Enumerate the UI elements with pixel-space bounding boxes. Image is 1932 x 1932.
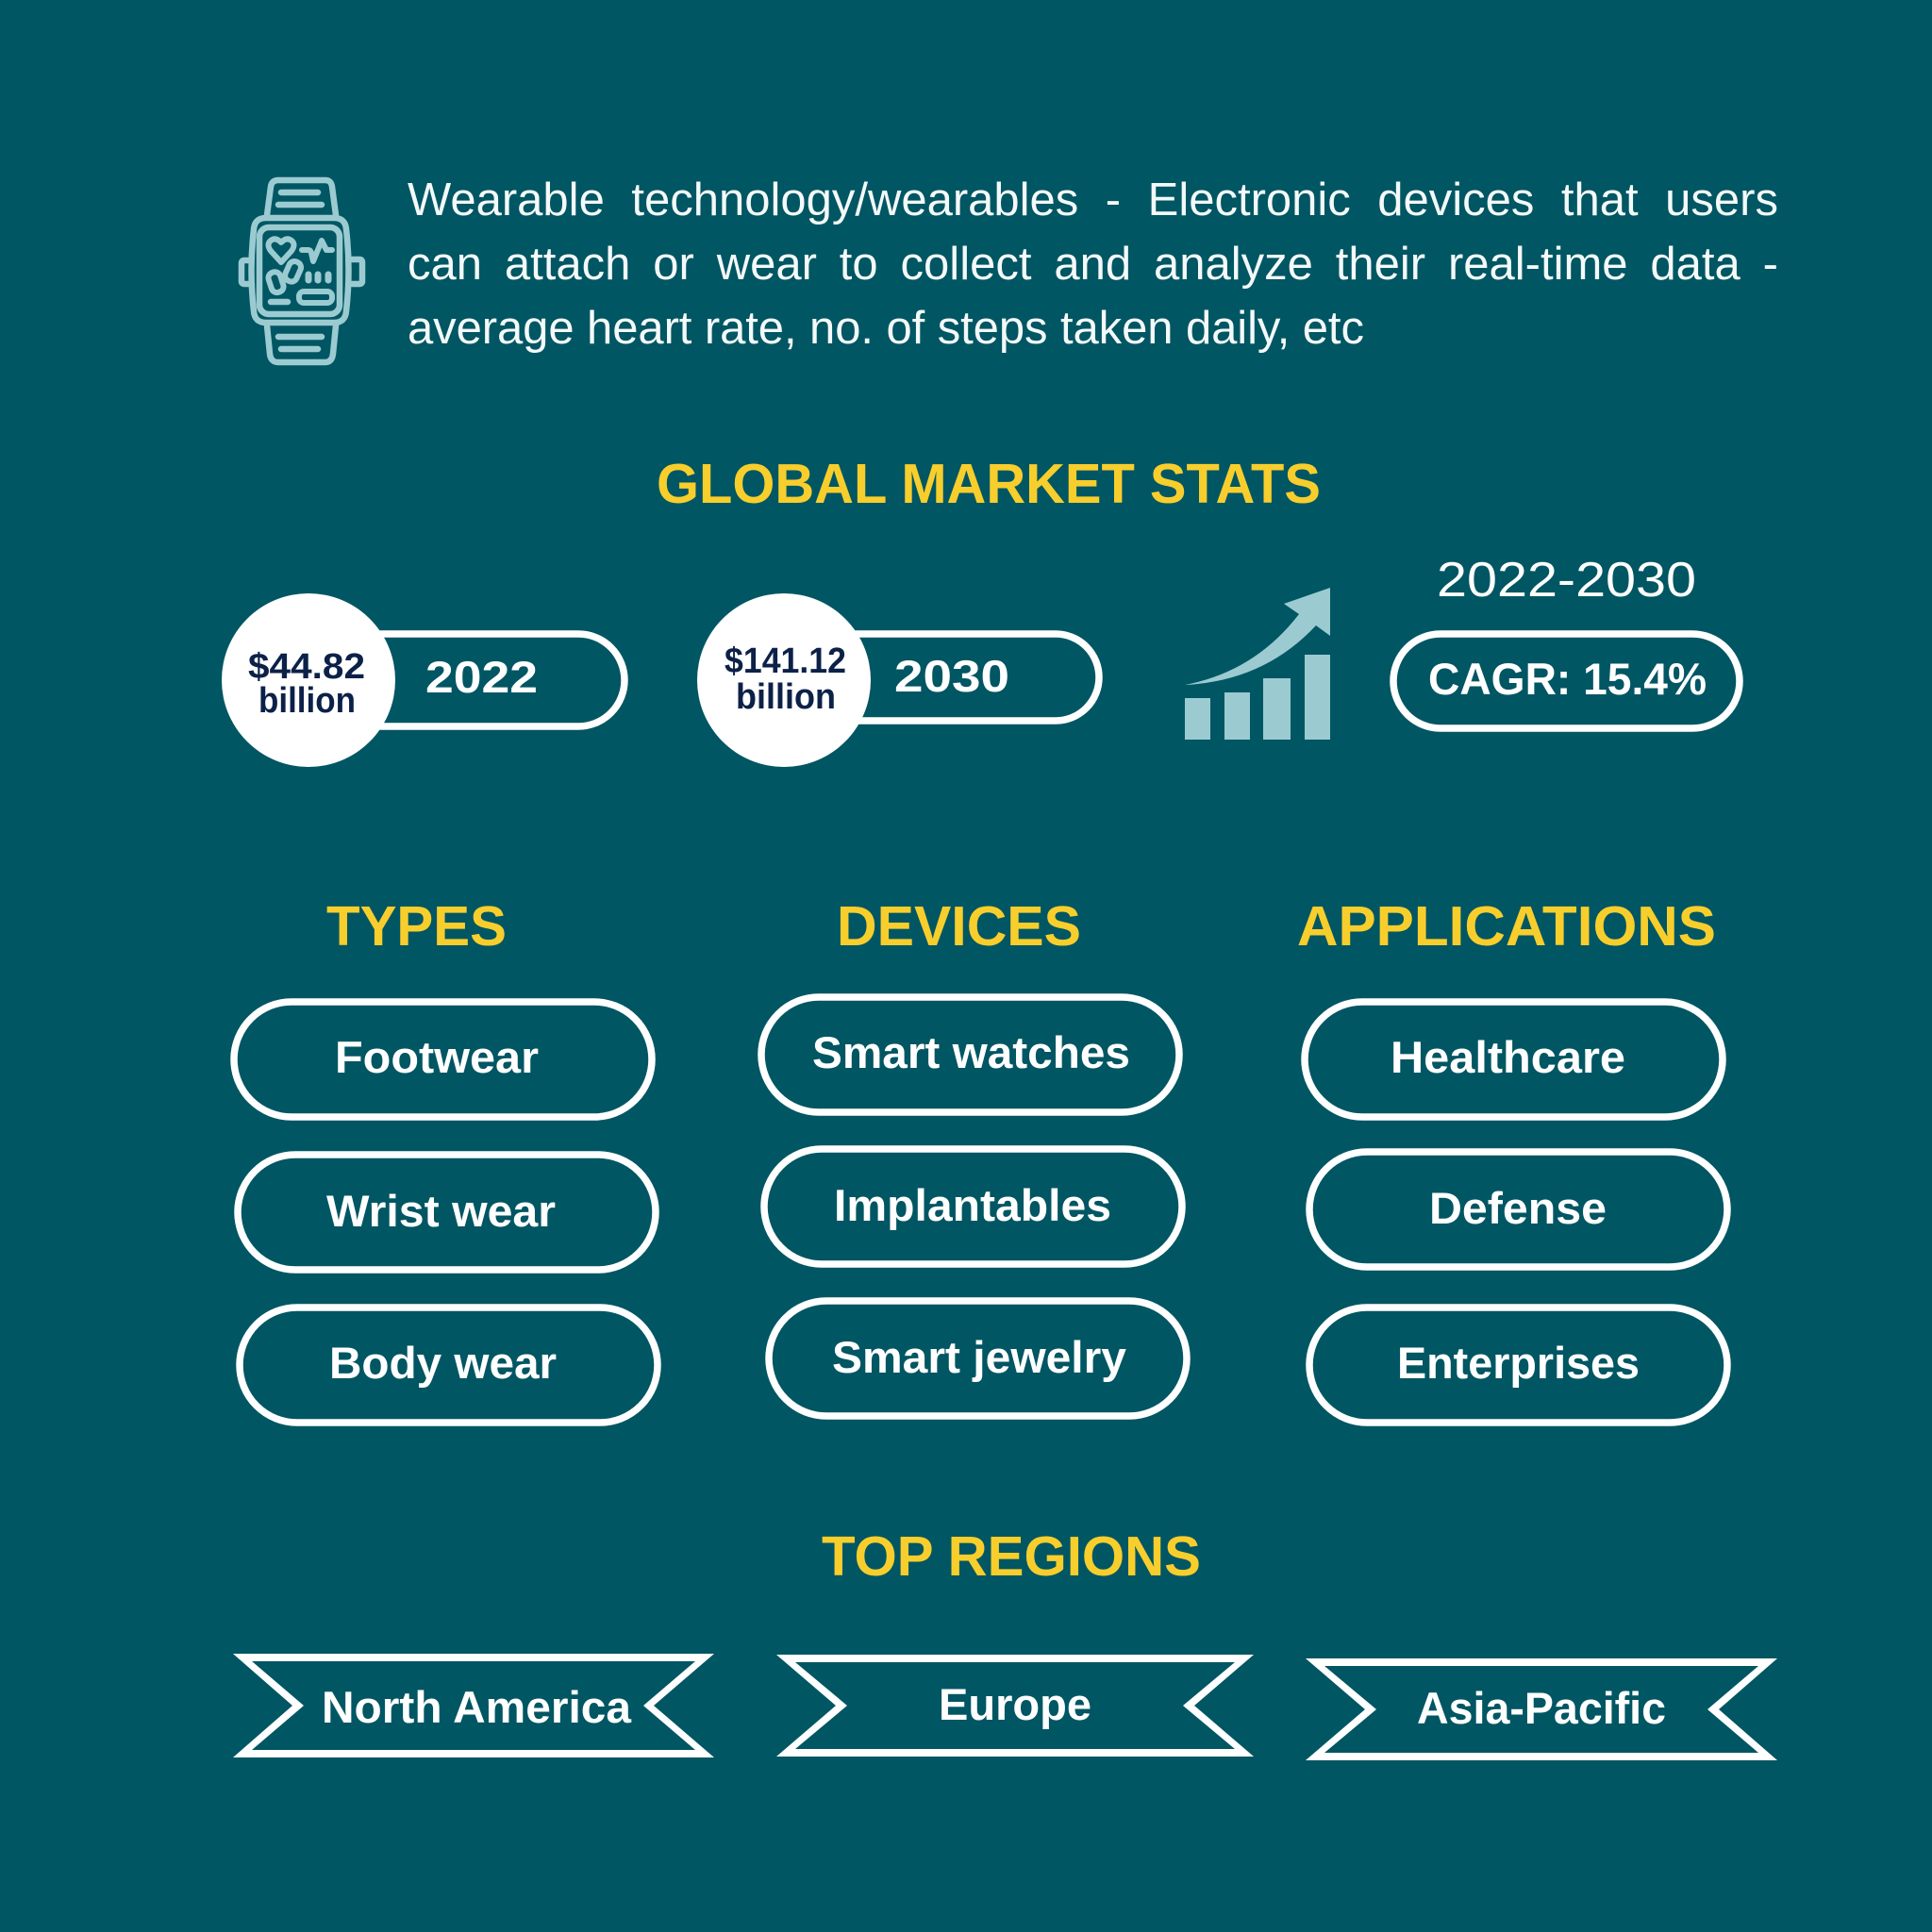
- icon: smartwatch: [242, 180, 362, 362]
- ribbon: asia-pacific: Asia-Pacific: [1417, 1683, 1666, 1733]
- pill: wrist wear: Wrist wear: [326, 1186, 556, 1236]
- pill: smart jewelry: [769, 1301, 1187, 1416]
- heading: applications: APPLICATIONS: [1297, 895, 1716, 958]
- stat: 2022 market size: $44.82: [248, 647, 365, 687]
- pill: implantables: Implantables: [834, 1180, 1111, 1230]
- pill: wrist wear: [238, 1155, 656, 1270]
- stat: 2022 market size: billion: [258, 681, 356, 721]
- pill: defense: [1309, 1152, 1727, 1267]
- pill: enterprises: [1309, 1307, 1727, 1423]
- pill: enterprises: Enterprises: [1397, 1338, 1640, 1388]
- pill: footwear: [234, 1002, 652, 1117]
- heading: devices: DEVICES: [837, 895, 1081, 958]
- stat: 2030 market size: billion: [736, 677, 836, 717]
- stat: 2030 market size: [697, 593, 1099, 767]
- pill: implantables: [764, 1149, 1182, 1264]
- ribbon: north america: North America: [322, 1682, 632, 1732]
- stat: 2022 market size: 2022: [425, 652, 538, 702]
- pill: healthcare: Healthcare: [1391, 1032, 1625, 1082]
- pill: defense: Defense: [1429, 1183, 1607, 1233]
- stat: 2030 market size: 2030: [894, 651, 1009, 701]
- pill: body wear: [240, 1307, 658, 1423]
- stat: 2030 market size: $141.12: [724, 641, 846, 681]
- pill: body wear: Body wear: [329, 1338, 557, 1388]
- heading: global market stats: GLOBAL MARKET STATS: [657, 453, 1321, 515]
- pill: smart watches: [761, 997, 1179, 1112]
- label: forecast period: 2022-2030: [1437, 553, 1696, 608]
- pill: smart watches: Smart watches: [812, 1027, 1130, 1077]
- heading: top regions: TOP REGIONS: [822, 1525, 1201, 1588]
- text block: wearable technology definition: Wearable technology/wearables - Electronic devices that users: [408, 175, 1778, 225]
- stat: CAGR pill: [1393, 634, 1740, 728]
- ribbon: europe: Europe: [939, 1679, 1091, 1729]
- pill: footwear: Footwear: [335, 1032, 539, 1082]
- stat: CAGR pill: CAGR: 15.4%: [1428, 654, 1707, 704]
- ribbon: europe: [776, 1655, 1254, 1757]
- pill: healthcare: [1305, 1002, 1723, 1117]
- pill: smart jewelry: Smart jewelry: [832, 1332, 1126, 1382]
- ribbon: asia-pacific: [1306, 1658, 1777, 1760]
- heading: types: TYPES: [326, 895, 507, 958]
- text block: wearable technology definition: average heart rate, no. of steps taken daily, etc: [408, 303, 1364, 354]
- icon: growth bar chart with arrow: [1185, 588, 1330, 740]
- stat: 2022 market size: [222, 593, 625, 767]
- text block: wearable technology definition: can attach or wear to collect and analyze their real-time data -: [408, 239, 1778, 290]
- ribbon: north america: [233, 1654, 714, 1757]
- text block: wearable technology definition: [408, 175, 1778, 354]
